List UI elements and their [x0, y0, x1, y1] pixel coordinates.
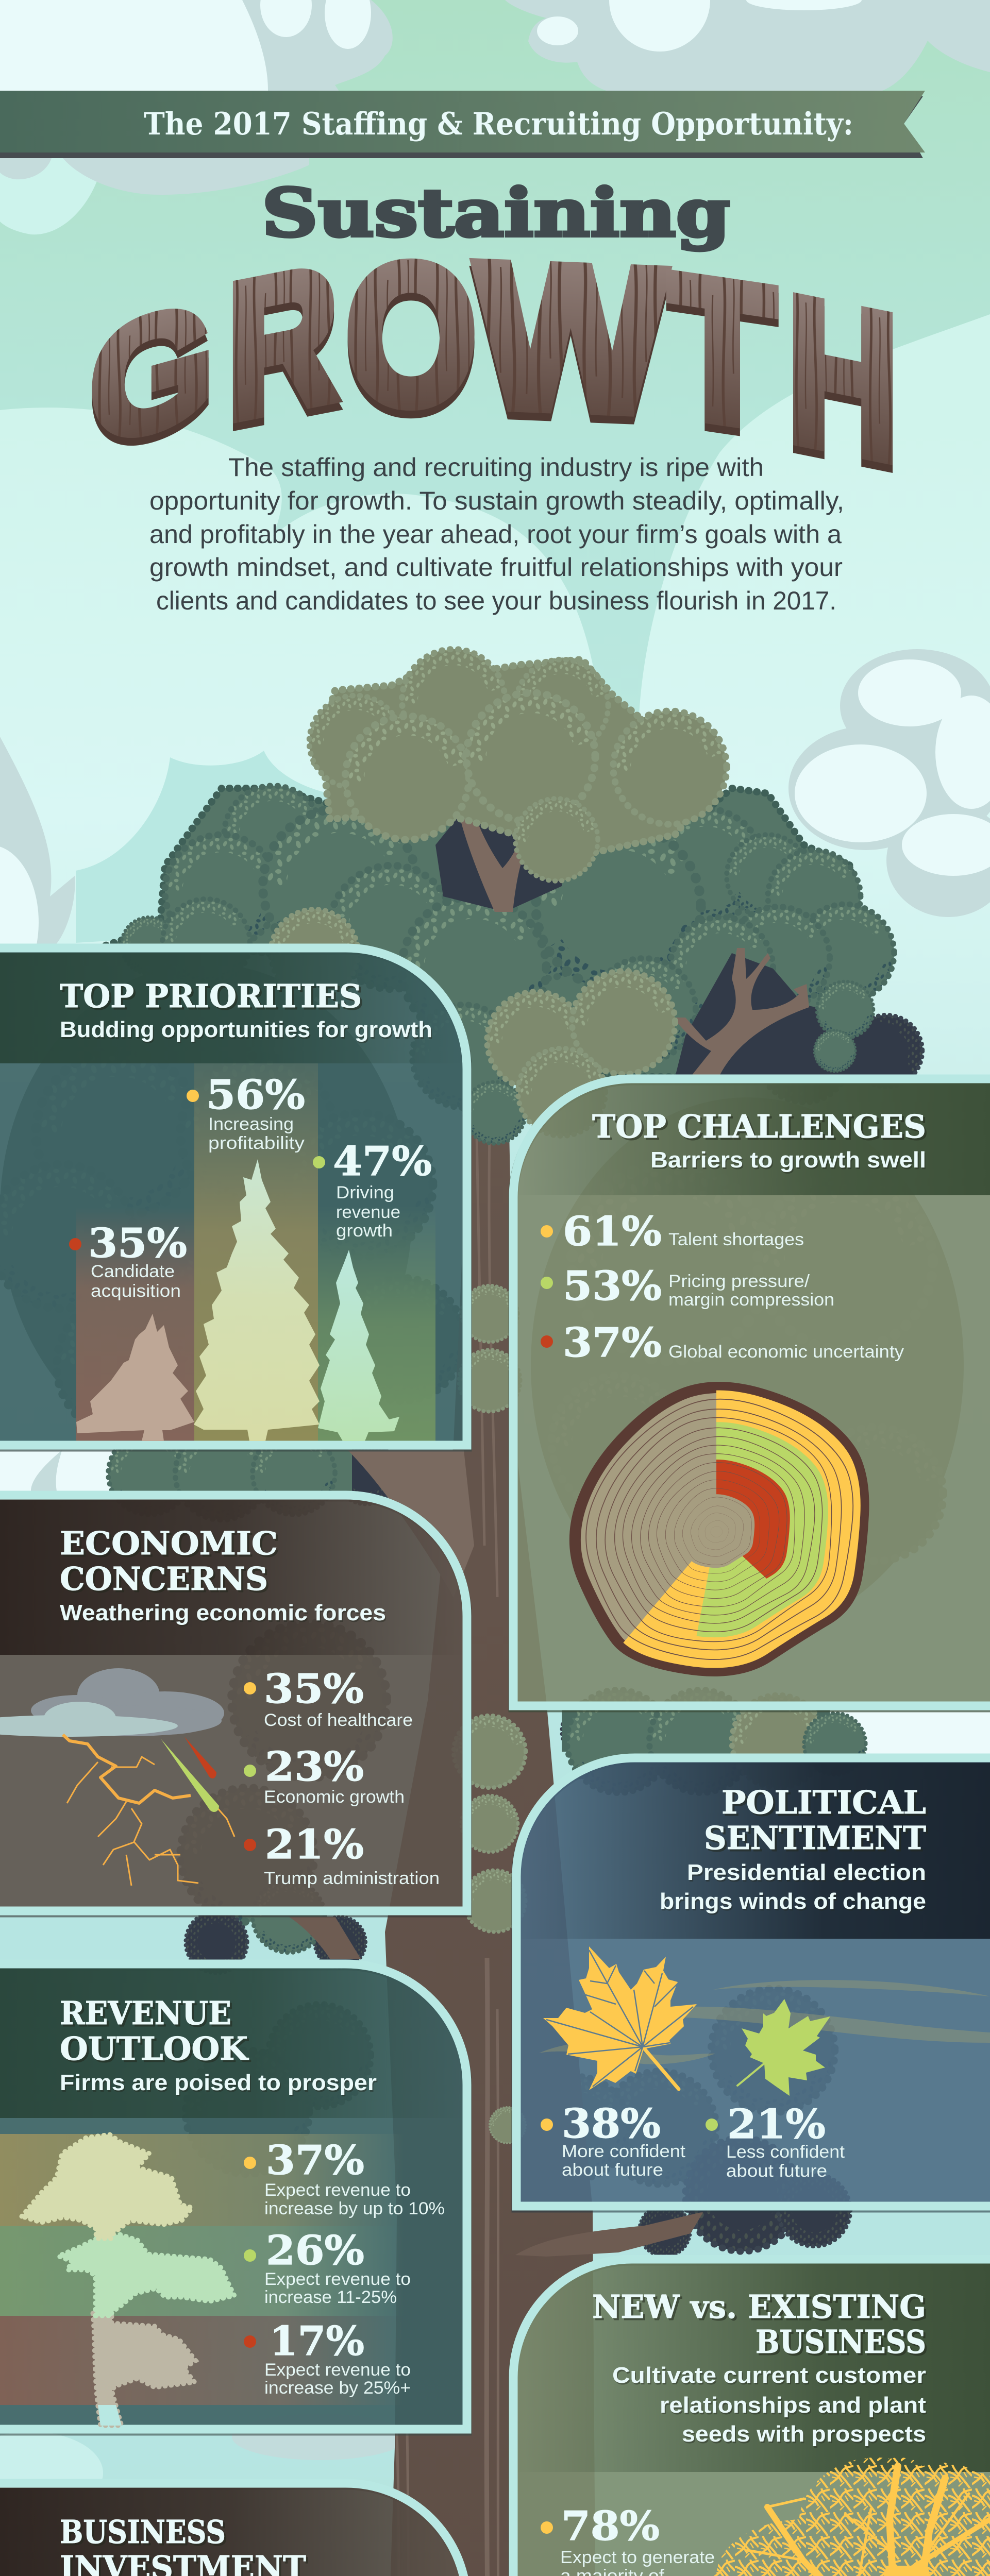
heading: GROWTH wood letters: H: [787, 253, 898, 504]
stat: 37% global economic uncertainty: 37%: [563, 1319, 662, 1366]
heading: OUTLOOK: [60, 2030, 249, 2067]
stat: 47% driving revenue growth: 47%: [333, 1138, 432, 1185]
stat: 21% trump administration: 21%: [265, 1821, 364, 1868]
icon: yellow maple leaf: [543, 1946, 697, 2090]
stat: 61% talent shortages: 61%: [563, 1208, 662, 1255]
wind swooshes: [539, 1980, 990, 2064]
icon: storm cloud: [0, 1668, 224, 1737]
subheading: brings winds of change: [660, 1889, 926, 1914]
icon: trio of stacked trees: [22, 2134, 234, 2426]
heading: POLITICAL: [721, 1784, 926, 1821]
stat: 61% talent shortages: Talent shortages: [668, 1230, 804, 1249]
stat: 23% economic growth: [244, 1743, 405, 1807]
intro paragraph: clients and candidates to see your business flourish in 2017.: [156, 586, 836, 615]
stat: 17% 25%+: 17%: [270, 2318, 364, 2365]
stat: 37% up to 10%: [244, 2137, 445, 2218]
heading: BUSINESS: [60, 2513, 226, 2551]
stat: 38% more confident: 38%: [562, 2100, 661, 2147]
stat: 21% trump administration: [244, 1821, 440, 1888]
stat: 35% candidate acquisition: Candidate: [91, 1262, 175, 1281]
subheading: [612, 2363, 926, 2447]
heading: [60, 1524, 278, 1598]
heading: REVENUE: [60, 1994, 231, 2032]
heading: GROWTH wood letters: H: [787, 261, 898, 512]
stat: 23% economic growth: Economic growth: [264, 1787, 405, 1807]
stat: 21% trump administration: Trump administration: [264, 1869, 440, 1888]
stat: 35% cost of healthcare: Cost of healthcare: [264, 1710, 413, 1730]
subheading: Firms are poised to prosper: [60, 2070, 377, 2095]
heading: ECONOMIC: [60, 1524, 278, 1562]
stat: 78% existing clients: 78%: [561, 2503, 660, 2550]
tree hole lower with branch: [673, 948, 912, 1077]
heading: [592, 2288, 926, 2361]
stat: 78% existing clients: [541, 2503, 715, 2576]
heading: GROWTH wood letters: G: [90, 275, 214, 487]
heading: BUSINESS: [756, 2323, 926, 2361]
stat: 35% cost of healthcare: 35%: [264, 1666, 364, 1713]
subheading: seeds with prospects: [682, 2421, 926, 2447]
panel: economic concerns: [0, 1495, 467, 1912]
heading: [60, 1994, 249, 2067]
stat: 56% increasing profitability: 56%: [206, 1072, 305, 1118]
heading: GROWTH wood letters: W: [477, 221, 667, 455]
stat: 17% 25%+: increase by 25%+: [264, 2378, 411, 2398]
stat: 47% driving revenue growth: Driving: [336, 1183, 394, 1202]
stat: 37% up to 10%: 37%: [266, 2137, 364, 2184]
intro paragraph: growth mindset, and cultivate fruitful relationships with your: [149, 553, 843, 582]
stat: 53% pricing pressure: margin compression: [668, 1290, 834, 1310]
tree hole upper with branch: [435, 791, 567, 912]
intro paragraph: The staffing and recruiting industry is ripe with: [228, 453, 764, 482]
icon: falling streaks: [161, 1737, 219, 1812]
tree trunk: [289, 1051, 703, 2576]
title banner: The 2017 Staffing & Recruiting Opportunity:: [144, 106, 853, 142]
heading: Sustaining: Sustaining: [262, 175, 730, 252]
stat: 17% 25%+: Expect revenue to: [264, 2360, 411, 2380]
tree crown: [106, 649, 912, 2143]
heading: NEW vs. EXISTING: [592, 2288, 926, 2326]
heading: GROWTH wood letters: [90, 221, 898, 512]
stat: 21% less confident: Less confident: [726, 2142, 845, 2162]
heading: GROWTH wood letters: T: [669, 233, 775, 470]
stat: 47% driving revenue growth: growth: [336, 1221, 393, 1241]
stat: 53% pricing pressure: [541, 1263, 834, 1310]
chart: tree-stump rings: [575, 1387, 864, 1671]
stat: 37% global economic uncertainty: Global economic uncertainty: [668, 1342, 904, 1362]
intro paragraph: opportunity for growth. To sustain growth steadily, optimally,: [149, 486, 844, 515]
stat: 53% pricing pressure: 53%: [563, 1263, 662, 1310]
heading: GROWTH wood letters: O: [346, 231, 477, 453]
heading: [60, 2513, 306, 2576]
stat: 56% increasing profitability: profitability: [208, 1133, 305, 1153]
panel: top priorities: [0, 948, 467, 1447]
stat: 35% cost of healthcare: [244, 1666, 413, 1730]
icon: big fir: [194, 1159, 320, 1441]
stat: 17% 25%+: [244, 2318, 411, 2398]
stat: 56% increasing profitability: Increasing: [208, 1114, 294, 1134]
icon: green fir: [318, 1250, 399, 1441]
subheading: Budding opportunities for growth: [60, 1017, 432, 1042]
heading: TOP CHALLENGES: [592, 1108, 926, 1145]
stat: 37% global economic uncertainty: [541, 1319, 904, 1366]
icon: red fir: [76, 1314, 194, 1441]
stat: 61% talent shortages: [541, 1208, 804, 1255]
subheading: relationships and plant: [660, 2393, 926, 2418]
stat: 53% pricing pressure: Pricing pressure/: [668, 1272, 810, 1291]
heading: CONCERNS: [60, 1560, 268, 1598]
title banner: [0, 91, 925, 158]
stat: 38% more confident: [541, 2100, 686, 2180]
subheading: [660, 1860, 926, 1914]
stat: 35% candidate acquisition: acquisition: [91, 1281, 181, 1301]
panel: revenue outlook: [0, 1964, 467, 2431]
stat: 38% more confident: More confident: [562, 2142, 686, 2161]
stat: 47% driving revenue growth: revenue: [336, 1202, 400, 1222]
stat: 26% 11-25%: 26%: [266, 2227, 364, 2274]
heading: SENTIMENT: [704, 1819, 926, 1857]
stat: 26% 11-25%: Expect revenue to: [264, 2269, 411, 2289]
panel: new vs existing business: [510, 2259, 990, 2576]
heading: GROWTH wood letters: G: [90, 267, 214, 480]
stat: 38% more confident: about future: [562, 2160, 663, 2180]
stat: 21% less confident: [706, 2101, 845, 2181]
heading: [704, 1784, 926, 1857]
heading: GROWTH wood letters: R: [227, 232, 338, 467]
intro paragraph: [149, 453, 844, 615]
subheading: Barriers to growth swell: [650, 1147, 926, 1173]
stat: 78% existing clients: Expect to generate: [560, 2548, 715, 2567]
stat: 23% economic growth: 23%: [265, 1743, 364, 1790]
panel: top challenges: [510, 1079, 990, 1707]
stat: 26% 11-25%: [244, 2227, 411, 2307]
heading: GROWTH wood letters: W: [477, 228, 667, 463]
heading: GROWTH wood letters: R: [227, 225, 338, 460]
heading: TOP PRIORITIES: [60, 977, 362, 1015]
heading: GROWTH wood letters: O: [346, 223, 477, 445]
stat: 21% less confident: about future: [726, 2161, 827, 2181]
panel: business investment: [0, 2483, 467, 2576]
icon: yellow oak tree: [696, 2458, 990, 2576]
stat: 56% increasing profitability: [187, 1072, 305, 1153]
icon: lightning: [63, 1735, 234, 1886]
heading: GROWTH wood letters: T: [669, 241, 775, 478]
subheading: Cultivate current customer: [612, 2363, 926, 2388]
intro paragraph: and profitably in the year ahead, root your firm’s goals with a: [149, 520, 842, 549]
stat: 35% candidate acquisition: [69, 1220, 187, 1301]
stat: 37% up to 10%: increase by up to 10%: [264, 2199, 445, 2218]
stat: 26% 11-25%: increase 11-25%: [264, 2287, 397, 2307]
stat: 37% up to 10%: Expect revenue to: [264, 2180, 411, 2200]
stat: 21% less confident: 21%: [727, 2101, 826, 2148]
stat: 35% candidate acquisition: 35%: [88, 1220, 187, 1267]
stat: 47% driving revenue growth: [313, 1138, 432, 1241]
subheading: Presidential election: [687, 1860, 926, 1885]
tree: foliage behind trunk: [0, 963, 964, 2257]
subheading: Weathering economic forces: [60, 1600, 386, 1625]
panel: political sentiment: [513, 1758, 990, 2208]
icon: green maple leaf: [737, 1999, 830, 2096]
